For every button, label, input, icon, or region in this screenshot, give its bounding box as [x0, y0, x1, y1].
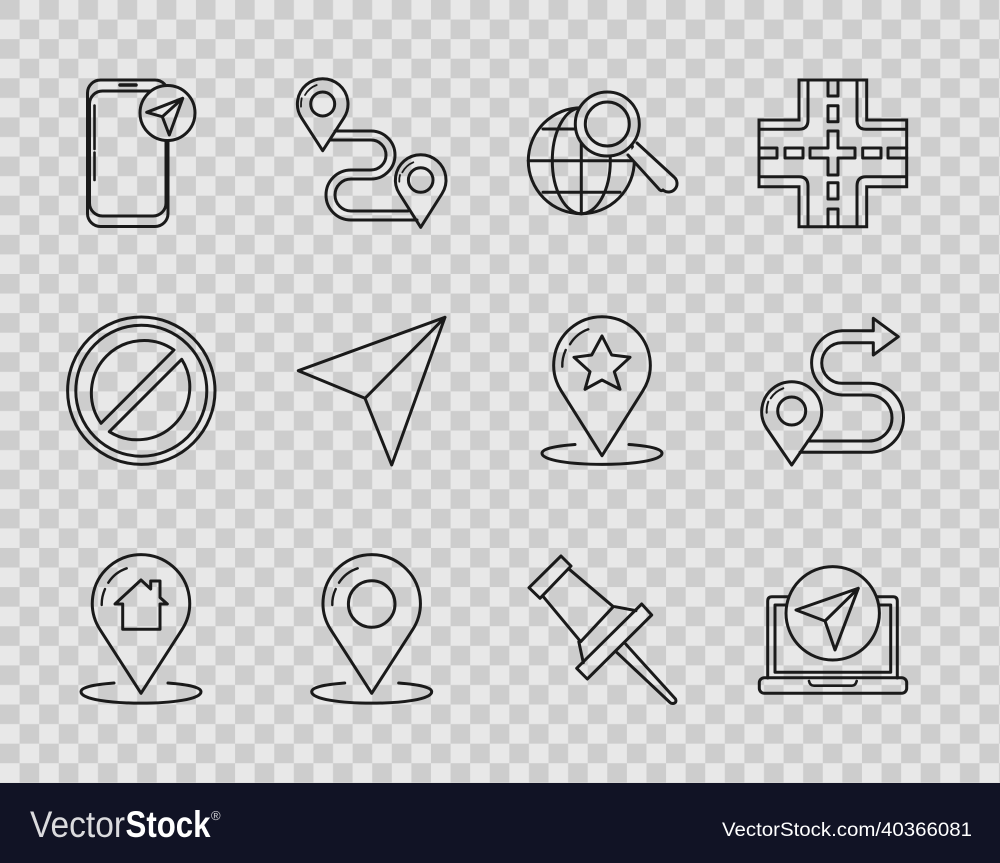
icon: globe with magnifying glass: [528, 92, 677, 214]
icon: road intersection: [759, 80, 907, 227]
logo wordmark: Vector: [30, 804, 125, 845]
icon: location pin with house: [81, 555, 201, 703]
icon: laptop with navigation arrow: [759, 567, 907, 693]
icon: route between two location pins: [297, 79, 446, 227]
icon: push pin: [529, 556, 676, 704]
footer bar: [0, 783, 1000, 863]
icon: pin with winding route arrow: [762, 318, 904, 465]
icon: smartphone with navigation arrow: [88, 80, 195, 226]
icon: location pin with circle: [312, 555, 432, 703]
logo wordmark: ®: [211, 808, 221, 823]
icon: location pin with star: [542, 317, 662, 464]
icon: no-entry prohibition sign: [68, 317, 215, 464]
logo wordmark: [30, 804, 221, 845]
image id text: VectorStock.com/40366081: [722, 820, 972, 841]
icon: navigation arrow: [298, 317, 445, 465]
logo wordmark: Stock: [126, 804, 211, 845]
